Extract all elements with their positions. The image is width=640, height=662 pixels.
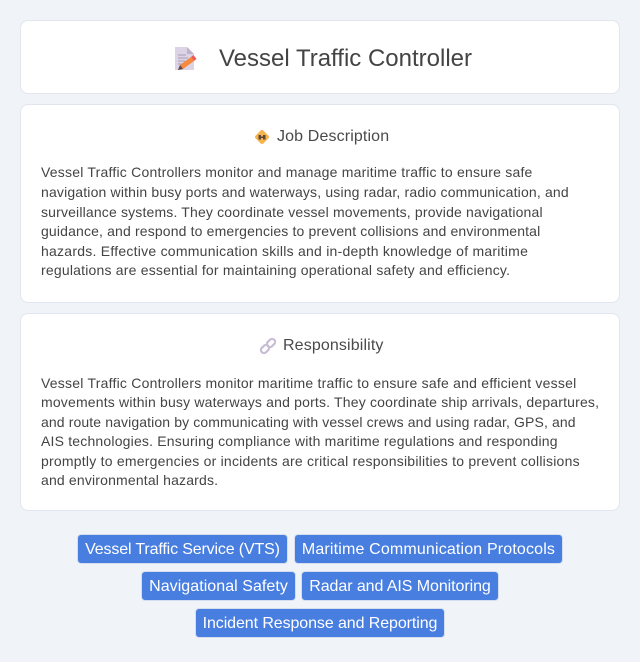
text block: responsibility: movements within busy waterways and ports. They coordinate ship arrivals, departures, xyxy=(41,394,599,410)
text block: responsibility: AIS technologies. Ensuring compliance with maritime regulations and responding xyxy=(41,433,558,449)
text block: responsibility: promptly to emergencies or incidents are critical responsibilities to prevent collisions xyxy=(41,453,580,469)
text block: job description: Vessel Traffic Controllers monitor and manage maritime traffic to ensure safe xyxy=(41,164,533,180)
icon: document with pencil xyxy=(175,47,196,70)
text block: job description: regulations are essential for maintaining operational safety and efficiency. xyxy=(41,262,510,278)
tag: communication protocols: Maritime Communication Protocols xyxy=(302,541,555,558)
text block: responsibility: and environmental hazards. xyxy=(41,472,218,488)
text block: job description: navigation within busy ports and waterways, using radar, radio communication, and xyxy=(41,184,569,200)
tag: radar and AIS: Radar and AIS Monitoring xyxy=(309,578,491,595)
tag: incident response xyxy=(195,608,445,638)
tag: navigational safety: Navigational Safety xyxy=(149,578,288,595)
tag group xyxy=(77,534,563,638)
tag: incident response: Incident Response and Reporting xyxy=(203,615,437,632)
heading: responsibility: Responsibility xyxy=(283,337,384,354)
panel: title card xyxy=(20,20,620,94)
text block: responsibility: and route navigation by communicating with vessel crews and using radar, GPS, and xyxy=(41,414,576,430)
text block: responsibility: Vessel Traffic Controllers monitor maritime traffic to ensure safe and efficient vessel xyxy=(41,375,576,391)
icon: chain link xyxy=(260,338,276,354)
text block: job description: hazards. Effective communication skills and in-depth knowledge of maritime xyxy=(41,243,528,259)
panel: responsibility xyxy=(20,313,620,511)
tag: communication protocols xyxy=(294,534,563,564)
heading: job description: Job Description xyxy=(277,128,389,145)
tag: radar and AIS xyxy=(301,571,499,601)
tag: VTS: Vessel Traffic Service (VTS) xyxy=(85,541,280,558)
title: Vessel Traffic Controller xyxy=(219,45,472,72)
text block: job description: guidance, and respond to emergencies to prevent collisions and environmental xyxy=(41,223,540,239)
text block: job description: surveillance systems. They coordinate vessel movements, provide navigational xyxy=(41,204,543,220)
icon: orange diamond sign xyxy=(255,130,269,144)
panel: job description xyxy=(20,104,620,303)
tag: navigational safety xyxy=(141,571,296,601)
text block: responsibility xyxy=(41,375,599,488)
text block: job description xyxy=(41,164,569,278)
tag: VTS xyxy=(77,534,288,564)
